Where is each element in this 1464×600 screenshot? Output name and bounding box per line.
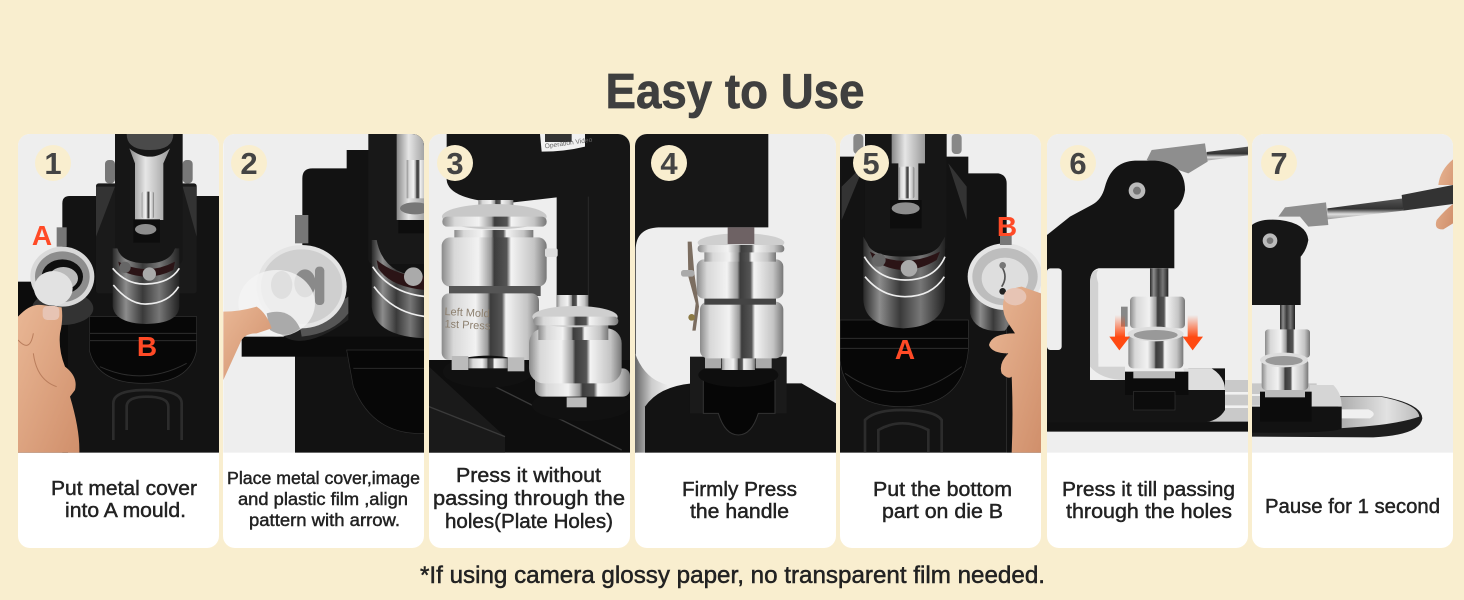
caption: step 7: Pause for 1 second bbox=[1265, 496, 1440, 518]
caption: step 4: the handle bbox=[690, 501, 789, 523]
caption: step 2 bbox=[227, 468, 420, 530]
caption: step 5: part on die B bbox=[882, 501, 1003, 523]
badge: 2 bbox=[231, 145, 267, 181]
caption: step 2: pattern with arrow. bbox=[249, 510, 400, 530]
badge: 4 bbox=[651, 145, 687, 181]
badge: 6 bbox=[1060, 145, 1096, 181]
label: B: B bbox=[997, 211, 1017, 242]
photo: step 1 press seen from above with hand placing cover bbox=[18, 113, 219, 453]
photo: step 6 side view of press with downward arrows bbox=[1047, 134, 1248, 453]
panel: step 1 bbox=[18, 113, 219, 548]
icon: left arrow bbox=[1109, 315, 1130, 350]
panel: step 2 bbox=[223, 113, 430, 548]
photo: step 3 close-up of moulds under press head: Operation Video bbox=[544, 137, 593, 150]
caption: step 4: Firmly Press bbox=[682, 479, 797, 501]
badge: 5 bbox=[853, 145, 889, 181]
photo: step 5 press from above with bottom part held by hand bbox=[840, 113, 1042, 453]
label: A: A bbox=[32, 220, 52, 251]
icon: right arrow bbox=[1183, 315, 1203, 350]
title: Easy to Use bbox=[606, 65, 864, 119]
badge: 3 bbox=[437, 145, 473, 181]
caption: step 5: Put the bottom bbox=[873, 479, 1012, 501]
badge: 3: 3 bbox=[446, 146, 464, 181]
badge: 7: 7 bbox=[1270, 146, 1288, 181]
caption: step 6: Press it till passing bbox=[1062, 479, 1235, 501]
panel: step 6 bbox=[1047, 134, 1248, 548]
photo: step 3 close-up of moulds under press head: 1st Press bbox=[444, 318, 491, 333]
caption: step 1: into A mould. bbox=[65, 500, 186, 522]
photo: step 7 hand holding handle down bbox=[1252, 134, 1453, 453]
caption: step 2: Place metal cover,image bbox=[227, 468, 420, 488]
caption: step 3 bbox=[433, 465, 625, 533]
panel: step 7 bbox=[1252, 134, 1453, 548]
badge: 1 bbox=[35, 145, 71, 181]
badge: 6: 6 bbox=[1069, 146, 1087, 181]
photo: step 3 close-up of moulds under press head bbox=[429, 134, 632, 453]
badge: 2: 2 bbox=[240, 146, 258, 181]
caption: step 1 bbox=[51, 478, 197, 522]
photo: step 3 close-up of moulds under press head: Left Mold bbox=[444, 306, 490, 320]
caption: step 6: through the holes bbox=[1066, 501, 1232, 523]
photo: step 2 aligning image and film in mould bbox=[223, 113, 430, 453]
panel: step 4 bbox=[635, 134, 836, 548]
photo: step 4 press with mould, handle pressed bbox=[635, 134, 836, 453]
badge: 7 bbox=[1261, 145, 1297, 181]
label: A: A bbox=[895, 334, 915, 365]
badge: 1: 1 bbox=[44, 146, 62, 181]
caption: step 3: passing through the bbox=[433, 488, 625, 510]
caption: step 3: Press it without bbox=[456, 465, 601, 487]
caption: step 2: and plastic film ,align bbox=[238, 489, 408, 509]
caption: step 5 bbox=[873, 479, 1012, 523]
badge: 4: 4 bbox=[660, 146, 678, 181]
caption: step 1: Put metal cover bbox=[51, 478, 197, 500]
caption: step 4 bbox=[682, 479, 797, 523]
panel: step 5 bbox=[840, 113, 1042, 548]
label: B: B bbox=[137, 331, 157, 362]
panel: step 3 bbox=[429, 134, 632, 548]
caption: step 3: holes(Plate Holes) bbox=[445, 511, 613, 533]
caption: step 6 bbox=[1062, 479, 1235, 523]
footnote: *If using camera glossy paper, no transparent film needed. bbox=[420, 562, 1045, 589]
badge: 5: 5 bbox=[862, 146, 880, 181]
